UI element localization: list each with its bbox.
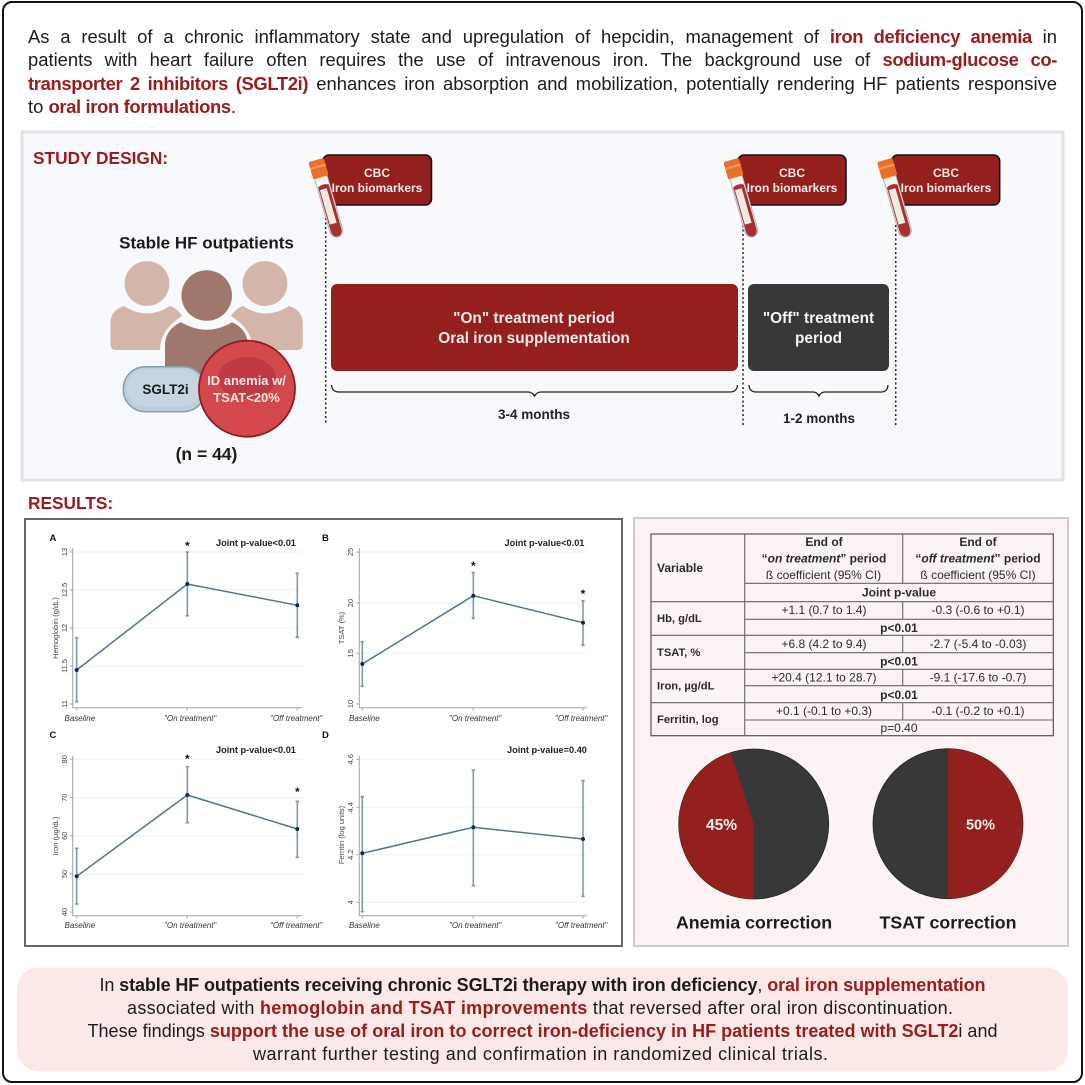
results table: End of xyxy=(805,535,844,549)
pie: TSAT correction xyxy=(873,749,1023,932)
icon: red blood cell: ID anemia w/ xyxy=(207,373,286,388)
biomarker box 1 xyxy=(308,155,432,239)
biomarker box 1: Iron biomarkers xyxy=(332,181,423,195)
biomarker box 3: Iron biomarkers xyxy=(901,181,992,195)
chart A: hemoglobin: 12 xyxy=(60,624,69,632)
brace: 3-4 months xyxy=(332,385,738,422)
chart D: ferritin: 4 xyxy=(346,900,355,904)
conclusion text: These findings support the use of oral iron to correct iron-deficiency in HF patients treated with SGLT2i and xyxy=(88,1021,998,1041)
icon: SGLT2i pill xyxy=(123,367,205,412)
intro text block: transporter 2 inhibitors (SGLT2i) enhances iron absorption and mobilization, potentially rendering HF patients responsive xyxy=(28,73,1057,94)
chart D: ferritin: 4.4 xyxy=(346,802,355,813)
results table: Ferritin, log xyxy=(657,714,719,726)
results table: -0.3 (-0.6 to +0.1) xyxy=(931,603,1025,617)
icon: patients group xyxy=(110,261,303,385)
sample label: Stable HF outpatients xyxy=(119,234,294,252)
biomarker box 2: CBC xyxy=(779,166,805,180)
chart A: hemoglobin: Joint p-value<0.01 xyxy=(216,538,296,548)
panel: table and pies xyxy=(634,518,1068,946)
icon: SGLT2i pill: SGLT2i xyxy=(142,382,189,397)
chart D: ferritin: Joint p-value=0.40 xyxy=(507,745,587,755)
off treatment period bar xyxy=(748,284,889,371)
chart B: TSAT: * xyxy=(471,559,476,573)
chart B: TSAT: 25 xyxy=(346,548,355,556)
conclusion text: warrant further testing and confirmation in randomized clinical trials. xyxy=(252,1044,828,1064)
chart C: iron: 80 xyxy=(60,755,69,763)
chart A: hemoglobin: 12.5 xyxy=(60,583,69,597)
results table: p<0.01 xyxy=(880,688,918,702)
chart B: TSAT: "On treatment" xyxy=(449,714,503,723)
chart D: ferritin: Baseline xyxy=(349,921,380,930)
pie: anemia correction: 45% xyxy=(706,817,737,834)
sample size: (n = 44) xyxy=(176,444,237,464)
chart C: iron: 60 xyxy=(60,832,69,840)
chart C: iron xyxy=(50,730,324,930)
chart C: iron: "On treatment" xyxy=(164,921,218,930)
chart A: hemoglobin: Baseline xyxy=(64,714,96,723)
biomarker box 3: CBC xyxy=(933,166,959,180)
results table: “on treatment” period xyxy=(762,552,886,566)
intro text block: patients with heart failure often requires the use of intravenous iron. The background use of sodium-glucose co- xyxy=(28,49,1057,70)
chart C: iron: 40 xyxy=(60,908,69,916)
biomarker box 3 xyxy=(877,155,1000,239)
chart B: TSAT: * xyxy=(581,587,586,601)
results table: Hb, g/dL xyxy=(657,613,702,625)
chart B: TSAT xyxy=(322,533,609,723)
heading: results: RESULTS: xyxy=(28,493,113,513)
intro text block: As a result of a chronic inflammatory state and upregulation of hepcidin, management of iron deficiency anemia in xyxy=(28,26,1057,47)
chart C: iron: C xyxy=(50,730,56,741)
chart B: TSAT: Joint p-value<0.01 xyxy=(504,538,584,548)
results table xyxy=(651,534,1053,736)
brace: 1-2 months: 1-2 months xyxy=(783,411,855,426)
chart D: ferritin xyxy=(322,730,609,930)
chart D: ferritin: D xyxy=(322,730,329,741)
pie: TSAT correction: 50% xyxy=(966,818,995,834)
results table: ß coefficient (95% CI) xyxy=(920,568,1036,582)
on treatment period bar: "On" treatment period xyxy=(453,310,615,327)
biomarker box 1: CBC xyxy=(364,166,390,180)
results table: p<0.01 xyxy=(880,654,918,668)
pie: TSAT correction: TSAT correction xyxy=(880,912,1016,932)
biomarker box 2: Iron biomarkers xyxy=(747,181,838,195)
conclusion text: In stable HF outpatients receiving chronic SGLT2i therapy with iron deficiency, oral iron supplementation xyxy=(100,975,986,995)
chart A: hemoglobin: Hemoglobin (g/dL) xyxy=(51,597,60,659)
chart B: TSAT: 15 xyxy=(346,649,355,657)
chart C: iron: Joint p-value<0.01 xyxy=(216,745,296,755)
pie: anemia correction: Anemia correction xyxy=(676,912,832,932)
chart B: TSAT: B xyxy=(322,533,329,544)
off treatment period bar: "Off" treatment xyxy=(763,310,874,327)
chart A: hemoglobin: * xyxy=(185,539,190,553)
conclusion text xyxy=(88,975,998,1064)
intro text block xyxy=(28,26,1057,117)
chart D: ferritin: 4.2 xyxy=(346,849,355,860)
pie: anemia correction xyxy=(676,749,832,932)
brace: 1-2 months xyxy=(749,385,888,426)
results table: p<0.01 xyxy=(880,621,918,635)
chart C: iron: 50 xyxy=(60,870,69,878)
results table: +6.8 (4.2 to 9.4) xyxy=(781,637,867,651)
chart D: ferritin: "Off treatment" xyxy=(555,921,609,930)
results table: End of xyxy=(959,535,998,549)
chart B: TSAT: TSAT (%) xyxy=(337,611,346,644)
results table: Iron, µg/dL xyxy=(657,680,715,692)
dotted timeline markers xyxy=(326,218,896,425)
chart A: hemoglobin: A xyxy=(50,533,56,544)
results table: Variable xyxy=(657,561,703,575)
chart D: ferritin: Ferritin (log units) xyxy=(337,805,346,864)
biomarker box 2 xyxy=(723,155,846,239)
chart B: TSAT: "Off treatment" xyxy=(555,714,609,723)
results table: +0.1 (-0.1 to +0.3) xyxy=(776,704,872,718)
chart C: iron: * xyxy=(185,752,190,766)
chart B: TSAT: 10 xyxy=(346,700,355,708)
chart A: hemoglobin: 13 xyxy=(60,548,69,556)
chart A: hemoglobin: 11 xyxy=(60,700,69,708)
results table: -2.7 (-5.4 to -0.03) xyxy=(930,637,1026,651)
chart A: hemoglobin: "Off treatment" xyxy=(270,714,324,723)
on treatment period bar: Oral iron supplementation xyxy=(438,330,630,347)
results table: -9.1 (-17.6 to -0.7) xyxy=(930,670,1026,684)
chart C: iron: "Off treatment" xyxy=(270,921,324,930)
conclusion panel xyxy=(17,968,1068,1072)
chart D: ferritin: 4.6 xyxy=(346,754,355,765)
results table: “off treatment” period xyxy=(915,552,1041,566)
chart B: TSAT: 20 xyxy=(346,599,355,607)
chart D: ferritin: "On treatment" xyxy=(449,921,503,930)
conclusion text: associated with hemoglobin and TSAT improvements that reversed after oral iron discontinuation. xyxy=(127,998,953,1018)
chart A: hemoglobin xyxy=(50,533,324,723)
icon: red blood cell: TSAT<20% xyxy=(213,390,280,405)
on treatment period bar xyxy=(331,284,738,371)
results table: +20.4 (12.1 to 28.7) xyxy=(771,670,877,684)
results table: ß coefficient (95% CI) xyxy=(766,568,881,582)
icon: red blood cell xyxy=(199,341,295,437)
off treatment period bar: period xyxy=(795,330,842,347)
chart C: iron: 70 xyxy=(60,794,69,802)
panel: line charts xyxy=(25,519,622,946)
results table: TSAT, % xyxy=(657,647,700,659)
chart C: iron: * xyxy=(295,785,300,799)
panel: study design xyxy=(22,132,1063,480)
results table: +1.1 (0.7 to 1.4) xyxy=(781,603,867,617)
heading: study design: STUDY DESIGN: xyxy=(33,148,168,168)
chart B: TSAT: Baseline xyxy=(349,714,380,723)
chart C: iron: Iron (µg/dL) xyxy=(51,816,60,855)
chart C: iron: Baseline xyxy=(64,921,96,930)
results table: Joint p-value xyxy=(862,586,936,600)
chart A: hemoglobin: "On treatment" xyxy=(164,714,218,723)
results table: p=0.40 xyxy=(880,721,918,735)
results table: -0.1 (-0.2 to +0.1) xyxy=(931,704,1025,718)
brace: 3-4 months: 3-4 months xyxy=(498,407,570,422)
intro text block: to oral iron formulations. xyxy=(28,96,236,117)
chart A: hemoglobin: 11.5 xyxy=(60,659,69,673)
